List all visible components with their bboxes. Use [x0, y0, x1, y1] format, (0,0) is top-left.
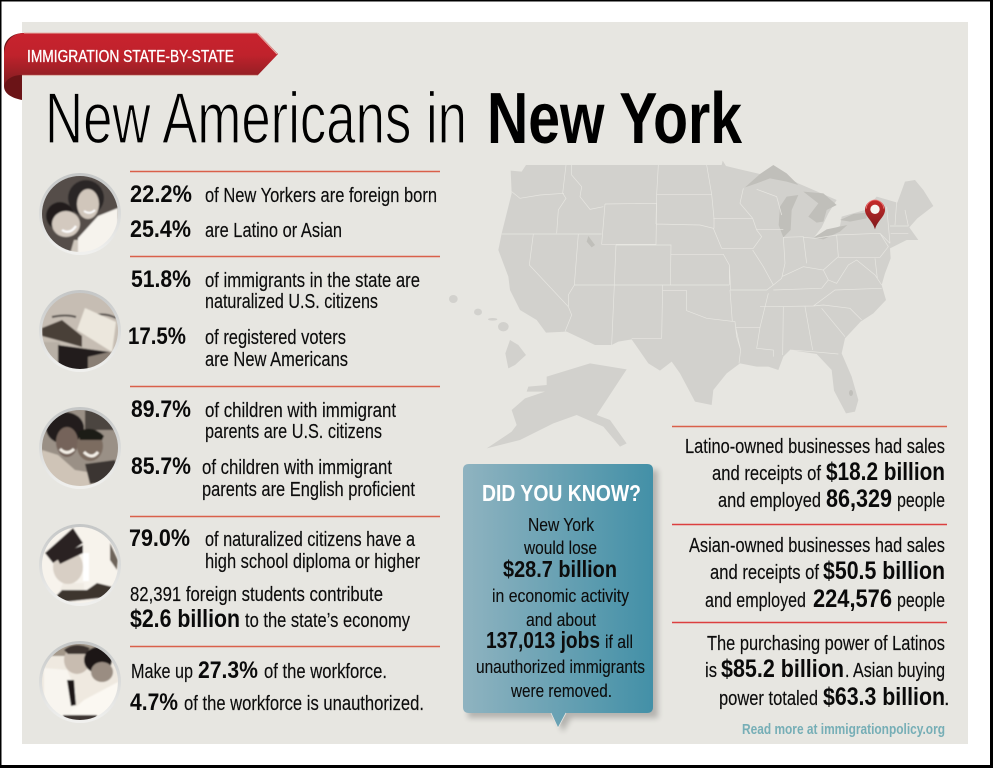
Latino-owned businesses: people	[897, 490, 945, 512]
section 1	[39, 172, 440, 255]
divider	[130, 256, 440, 258]
unauthorized share: 4.7%	[130, 689, 178, 716]
stat 17.5%: of registered voters	[205, 327, 346, 349]
ribbon label: IMMIGRATION STATE-BY-STATE	[27, 46, 234, 66]
section 2	[39, 256, 440, 372]
divider	[130, 386, 440, 388]
Asian-owned businesses	[672, 524, 947, 613]
callout body: 137,013 jobs	[486, 627, 600, 653]
purchasing power: The purchasing power of Latinos	[707, 633, 945, 655]
callout body: would lose	[523, 537, 597, 558]
purchasing power: $63.3 billion	[823, 683, 945, 711]
stat 79.0%	[129, 525, 420, 573]
Latino-owned businesses: $18.2 billion	[826, 458, 945, 486]
stat 25.4%: are Latino or Asian	[205, 220, 342, 242]
stat 85.7%: parents are English proficient	[202, 479, 415, 501]
Asian-owned businesses: and employed	[705, 590, 806, 612]
section 4	[39, 516, 440, 633]
callout body: and about	[526, 609, 596, 630]
stat 51.8%: of immigrants in the state are	[205, 270, 420, 292]
callout body: in economic activity	[492, 585, 630, 606]
stat 17.5%: are New Americans	[205, 349, 348, 371]
Latino-owned businesses: Latino-owned businesses had sales	[685, 436, 945, 458]
Asian-owned businesses: Asian-owned businesses had sales	[689, 535, 945, 557]
purchasing power: . Asian buying	[845, 660, 945, 682]
section 5	[39, 641, 440, 723]
photo: lab workers	[39, 641, 121, 723]
photo: mother and child	[39, 407, 121, 489]
source link text: Read more at immigrationpolicy.org	[742, 722, 945, 738]
US map	[449, 161, 933, 448]
foreign students: to the state’s economy	[245, 610, 410, 632]
workforce share: Make up	[131, 661, 193, 683]
callout body: unauthorized immigrants	[476, 656, 645, 677]
Latino-owned businesses: and receipts of	[712, 463, 821, 485]
stat 51.8%: naturalized U.S. citizens	[205, 291, 378, 313]
stat 22.2%: of New Yorkers are foreign born	[205, 185, 437, 207]
Latino-owned businesses: and employed	[718, 490, 821, 512]
workforce share: 27.3%	[198, 657, 258, 684]
callout body: were removed.	[510, 680, 612, 701]
purchasing power: .	[944, 688, 950, 710]
stat 89.7%: of children with immigrant	[205, 400, 396, 422]
purchasing power: is	[705, 660, 717, 682]
stat 89.7%	[131, 396, 396, 443]
callout body	[476, 514, 645, 701]
purchasing power: power totaled	[719, 688, 818, 710]
divider	[130, 170, 440, 172]
Asian-owned businesses: and receipts of	[710, 562, 819, 584]
foreign students: 82,391 foreign students contribute	[130, 584, 383, 606]
foreign students	[130, 584, 410, 633]
stat 17.5%	[128, 323, 348, 371]
purchasing power: $85.2 billion	[721, 655, 844, 683]
Asian-owned businesses: people	[897, 590, 945, 612]
unauthorized share: of the workforce is unauthorized.	[184, 693, 424, 715]
workforce share: of the workforce.	[264, 661, 387, 683]
Asian-owned businesses: 224,576	[813, 585, 892, 613]
section 3	[39, 386, 440, 501]
stat 25.4%	[130, 216, 342, 243]
stat 51.8%	[131, 266, 420, 313]
stat 85.7%: of children with immigrant	[202, 457, 392, 479]
stat 51.8%: 51.8%	[131, 266, 191, 293]
workforce share	[131, 657, 387, 684]
stat 79.0%: high school diploma or higher	[205, 551, 420, 573]
location pin	[865, 200, 885, 229]
stat 22.2%	[130, 181, 437, 208]
callout body: if all	[605, 631, 633, 652]
purchasing power	[672, 622, 950, 711]
stat 22.2%: 22.2%	[130, 181, 192, 208]
divider	[130, 516, 440, 518]
Alaska	[487, 363, 627, 448]
callout: did you know	[463, 464, 658, 732]
photo: graduate	[39, 524, 121, 606]
Asian-owned businesses: $50.5 billion	[823, 557, 945, 585]
divider	[130, 646, 440, 648]
contiguous states	[498, 161, 933, 413]
callout heading: DID YOU KNOW?	[482, 480, 641, 506]
foreign students: $2.6 billion	[130, 605, 240, 633]
photo: ballot	[39, 290, 121, 372]
great lakes	[587, 165, 867, 396]
stat 85.7%	[131, 453, 415, 501]
stat 85.7%: 85.7%	[131, 453, 191, 480]
stat 89.7%: 89.7%	[131, 396, 191, 423]
stat 89.7%: parents are U.S. citizens	[205, 421, 382, 443]
stat 79.0%: of naturalized citizens have a	[205, 529, 416, 551]
stat 25.4%: 25.4%	[130, 216, 191, 243]
Latino-owned businesses	[672, 426, 947, 513]
stat 79.0%: 79.0%	[129, 525, 190, 552]
title: New York	[487, 79, 743, 159]
title: New Americans in	[45, 79, 467, 159]
callout body: $28.7 billion	[503, 556, 617, 582]
Latino-owned businesses: 86,329	[826, 485, 892, 513]
stat 17.5%: 17.5%	[128, 323, 186, 350]
unauthorized share	[130, 689, 424, 716]
Hawaii	[449, 295, 526, 368]
red ribbon banner	[4, 33, 278, 100]
state borders	[502, 165, 908, 363]
callout body: New York	[528, 514, 595, 535]
photo: couple	[39, 173, 121, 255]
